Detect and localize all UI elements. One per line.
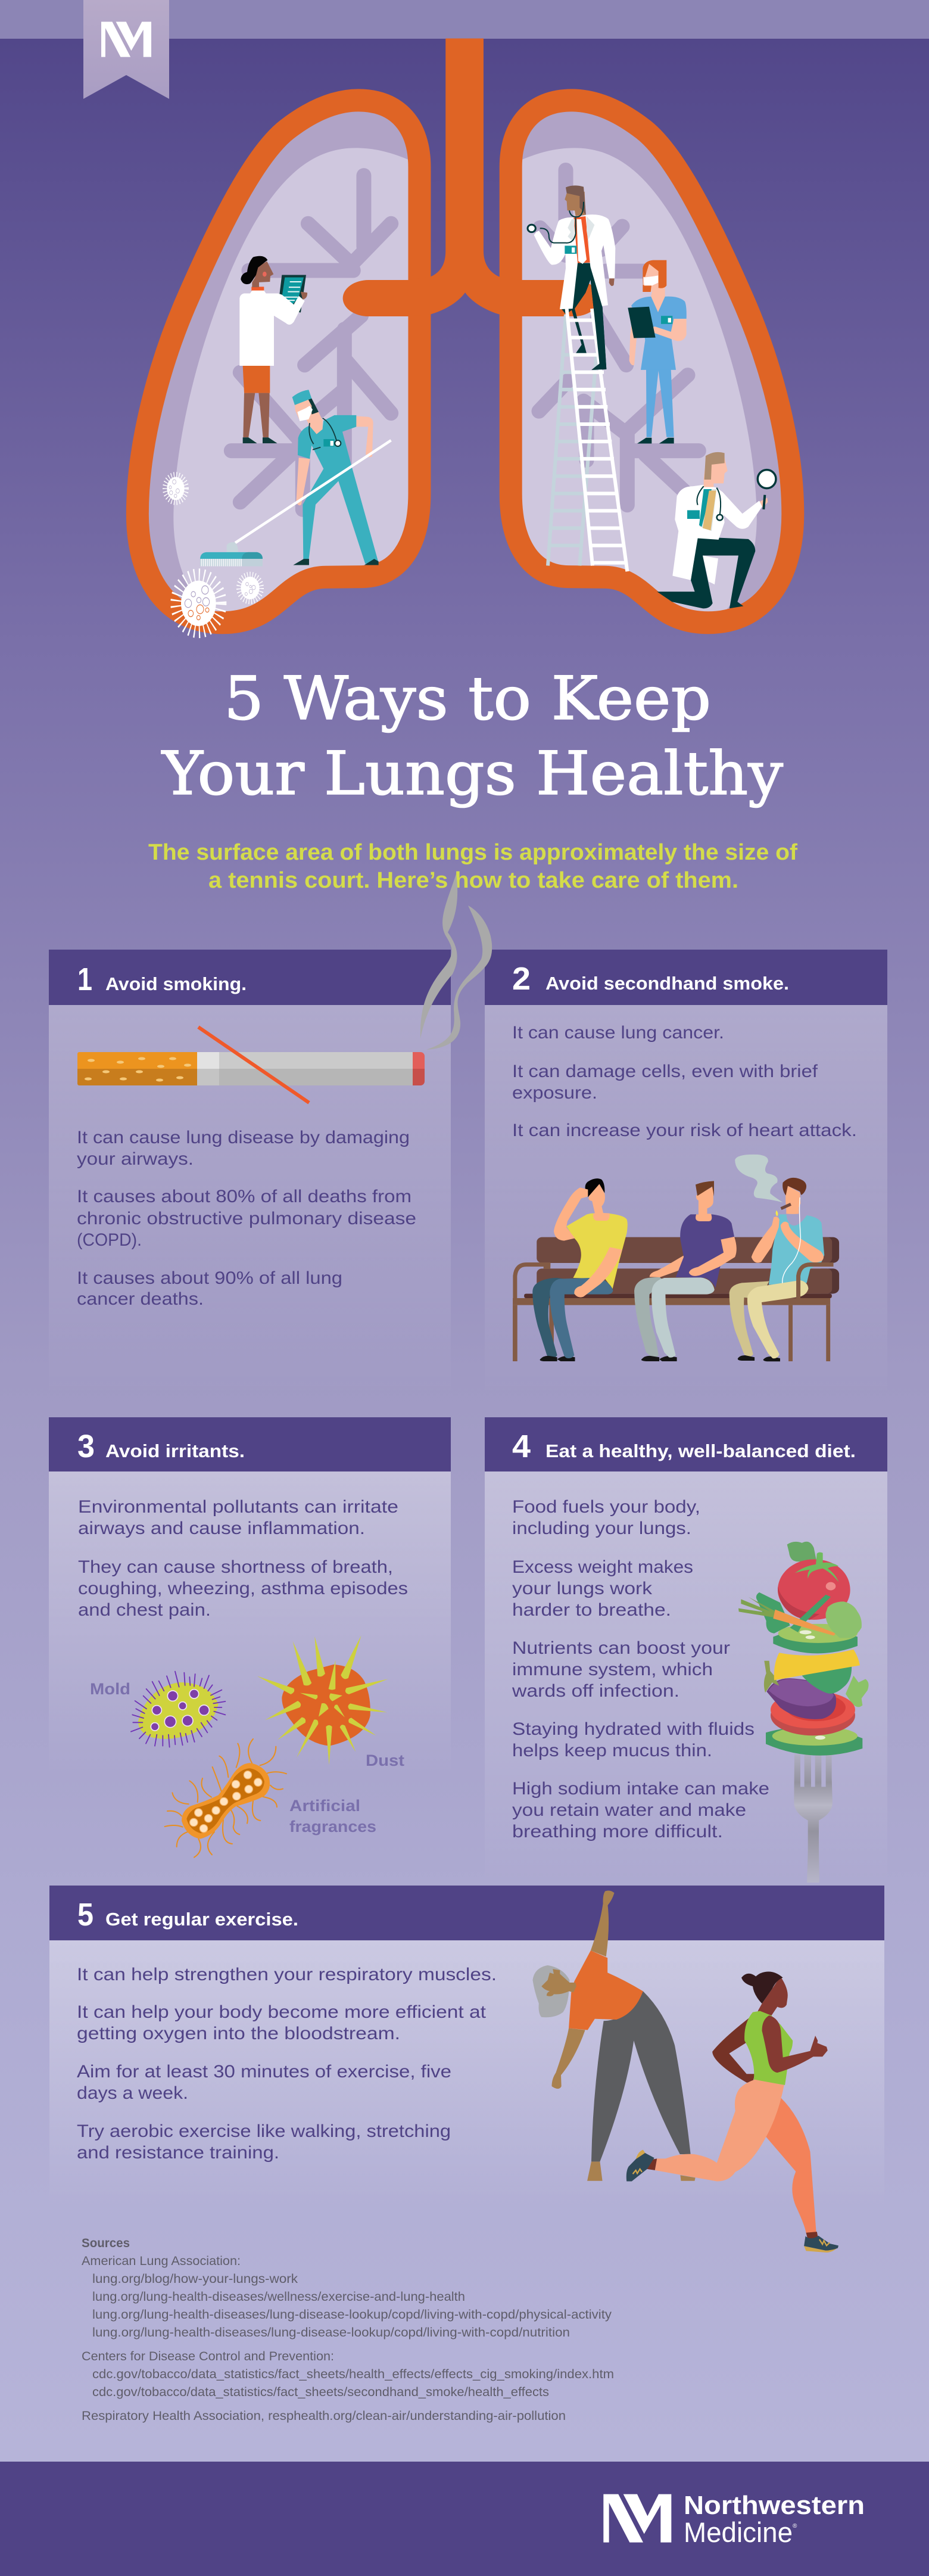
subtitle: The surface area of both lungs is approximately the size of — [148, 840, 797, 865]
panel 4 text: Staying hydrated with fluids — [512, 1719, 755, 1739]
panel 4 text — [512, 1497, 769, 1841]
panel 5 heading — [77, 1897, 298, 1933]
right lung bronchial tree — [539, 170, 699, 505]
panel 1: avoid smoking — [49, 950, 451, 1397]
panel 3 text: and chest pain. — [78, 1600, 211, 1620]
title: Your Lungs Healthy — [161, 739, 784, 808]
subtitle: a tennis court. Here’s how to take care of them. — [208, 868, 738, 893]
panel 3 text: airways and cause inflammation. — [78, 1519, 365, 1538]
panel 2 heading: 2 — [512, 961, 531, 997]
panel 3 heading: 3 — [77, 1429, 95, 1464]
person 3 smoking — [730, 1155, 834, 1361]
right lung — [504, 100, 793, 627]
microbe: medium germ — [239, 575, 261, 601]
figure: kneeling doctor with magnifier — [657, 452, 776, 608]
panel 5 text — [77, 1965, 497, 2163]
lungs illustration — [138, 100, 793, 627]
panel 1 text — [77, 1128, 416, 1309]
panel 3 heading: Avoid irritants. — [105, 1441, 245, 1461]
tomato — [778, 1542, 850, 1620]
microbe: large germ — [176, 575, 221, 631]
panel 2 text: It can increase your risk of heart attack. — [512, 1121, 857, 1140]
panel 4 text: immune system, which — [512, 1660, 713, 1679]
sources: lung.org/lung-health-diseases/lung-disease-lookup/copd/living-with-copd/nutrition — [92, 2326, 570, 2339]
sources: lung.org/lung-health-diseases/wellness/exercise-and-lung-health — [92, 2290, 465, 2304]
panel 1 heading: Avoid smoking. — [105, 973, 247, 994]
panel 4 text: helps keep mucus thin. — [512, 1741, 712, 1760]
panel 5 text: Aim for at least 30 minutes of exercise, five — [77, 2062, 451, 2082]
panel 4 text: High sodium intake can make — [512, 1779, 769, 1799]
right lung figures — [528, 185, 776, 608]
panel 5 heading: 5 — [77, 1897, 93, 1933]
footer logo — [603, 2491, 865, 2548]
panel 3 text — [78, 1497, 408, 1620]
sources: American Lung Association: — [82, 2254, 241, 2268]
mold — [131, 1672, 225, 1747]
panel 1 heading — [77, 962, 247, 997]
panel 1 text: (COPD). — [77, 1230, 142, 1250]
person 2 purple shirt — [634, 1181, 737, 1361]
lettuce behind — [846, 1676, 869, 1707]
panel 5: regular exercise — [49, 1886, 884, 2253]
panel 1 heading: 1 — [77, 962, 92, 997]
panel 2 text: exposure. — [512, 1083, 597, 1103]
panel 5 text: Try aerobic exercise like walking, stretching — [77, 2121, 451, 2141]
panel 1 text: It causes about 80% of all deaths from — [77, 1187, 411, 1206]
panel 5 text: It can help your body become more efficient at — [77, 2002, 487, 2022]
broccoli light — [825, 1601, 862, 1638]
panel 3 text: Environmental pollutants can irritate — [78, 1497, 398, 1517]
panel 5 text: and resistance training. — [77, 2143, 279, 2163]
panel 1 text: chronic obstructive pulmonary disease — [77, 1209, 416, 1228]
panel 2 heading — [512, 961, 789, 997]
panel 4 text: Nutrients can boost your — [512, 1638, 730, 1658]
panel 4 text: harder to breathe. — [512, 1600, 671, 1620]
panel 1 text: your airways. — [77, 1149, 194, 1169]
panel 1 text: It can cause lung disease by damaging — [77, 1128, 410, 1147]
panel 3 heading — [77, 1429, 245, 1464]
microbe: small germ — [166, 475, 186, 502]
title: 5 Ways to Keep — [224, 664, 711, 733]
sources — [82, 2236, 614, 2423]
panel 2 heading: Avoid secondhand smoke. — [545, 973, 789, 994]
panel 2 text — [512, 1023, 857, 1140]
illustration: vegetables on a fork — [738, 1542, 869, 1883]
green bean — [790, 1595, 831, 1632]
footer logo: ® — [793, 2523, 797, 2530]
footer logo: Medicine — [684, 2516, 793, 2548]
panel 4 text: your lungs work — [512, 1579, 653, 1598]
cigarette smoke — [420, 874, 492, 1050]
panel 4: healthy diet — [485, 1417, 887, 1886]
title — [161, 664, 784, 808]
figure: doctor with stethoscope on ladder — [528, 185, 615, 370]
trachea and bronchi — [343, 39, 599, 316]
panel 4 text: breathing more difficult. — [512, 1822, 723, 1841]
ribbon logo — [83, 0, 169, 99]
panel 4 text: including your lungs. — [512, 1519, 691, 1538]
left lung figures and germs — [166, 256, 391, 631]
footer band — [0, 2462, 929, 2576]
panel 4 text: wards off infection. — [512, 1681, 679, 1701]
figure: woman with tablet — [239, 256, 307, 443]
label: artificial fragrances: fragrances — [289, 1818, 376, 1835]
top band — [0, 0, 929, 39]
illustration: irritants — [131, 1635, 388, 1858]
figure: nurse with clipboard — [628, 260, 687, 443]
panel 1 text: It causes about 90% of all lung — [77, 1268, 342, 1288]
panel 4 text: you retain water and make — [512, 1800, 746, 1820]
carrot — [738, 1597, 836, 1636]
panel 2: avoid secondhand smoke — [485, 950, 887, 1397]
sources: cdc.gov/tobacco/data_statistics/fact_sheets/secondhand_smoke/health_effects — [92, 2385, 549, 2399]
panel 2 text: It can damage cells, even with brief — [512, 1062, 818, 1081]
left lung bronchial tree — [231, 270, 391, 509]
fork — [794, 1754, 833, 1883]
figure: surgeon with broom — [200, 390, 391, 567]
dust — [257, 1635, 388, 1765]
label: artificial fragrances — [289, 1797, 376, 1835]
front ladder — [567, 309, 627, 571]
panel 4 text: Excess weight makes — [512, 1557, 693, 1577]
left lung — [138, 100, 426, 627]
panel 3: avoid irritants — [49, 1417, 451, 1858]
panel 5 heading: Get regular exercise. — [105, 1909, 298, 1930]
woman running — [626, 1972, 838, 2253]
bottom cucumber — [766, 1726, 862, 1756]
bench — [513, 1237, 839, 1361]
broccoli dark — [802, 1664, 852, 1694]
sources: lung.org/blog/how-your-lungs-work — [92, 2272, 298, 2286]
dark leaves — [756, 1592, 790, 1634]
sources: Centers for Disease Control and Prevention: — [82, 2350, 334, 2363]
label: dust: Dust — [366, 1751, 404, 1769]
panel 4 heading: Eat a healthy, well-balanced diet. — [545, 1441, 856, 1461]
panel 4 heading — [512, 1429, 856, 1464]
illustration: people on bench — [513, 1155, 839, 1361]
footer logo: Northwestern — [684, 2491, 865, 2520]
label: mold: Mold — [90, 1680, 130, 1698]
panel 5 text: getting oxygen into the bloodstream. — [77, 2024, 400, 2043]
icon: crossed-out cigarette — [77, 1027, 425, 1103]
top cucumber — [773, 1624, 858, 1653]
cheese — [774, 1650, 860, 1680]
back ladder — [548, 315, 597, 565]
person 1 yellow shirt — [532, 1178, 628, 1361]
subtitle — [148, 840, 797, 893]
panel 1 text: cancer deaths. — [77, 1289, 204, 1309]
sources: Respiratory Health Association, resphealth.org/clean-air/understanding-air-pollution — [82, 2409, 566, 2423]
panel 2 text: It can cause lung cancer. — [512, 1023, 724, 1043]
sources: Sources — [82, 2236, 130, 2250]
woman stretching — [532, 1891, 696, 2181]
panel 4 text: Food fuels your body, — [512, 1497, 700, 1517]
tomato slice — [771, 1691, 855, 1735]
panel 3 text: coughing, wheezing, asthma episodes — [78, 1579, 408, 1598]
panel 4 heading: 4 — [512, 1429, 531, 1464]
illustration: exercising women — [532, 1891, 838, 2253]
eggplant — [764, 1661, 836, 1719]
sources: lung.org/lung-health-diseases/lung-disease-lookup/copd/living-with-copd/physical-activity — [92, 2308, 612, 2322]
panel 3 text: They can cause shortness of breath, — [78, 1557, 393, 1577]
sources: cdc.gov/tobacco/data_statistics/fact_sheets/health_effects/effects_cig_smoking/index.htm — [92, 2367, 614, 2381]
panel 5 text: It can help strengthen your respiratory muscles. — [77, 1965, 497, 1984]
label: artificial fragrances: Artificial — [289, 1797, 360, 1815]
panel 5 text: days a week. — [77, 2083, 188, 2103]
bacteria fragrances — [165, 1739, 286, 1858]
